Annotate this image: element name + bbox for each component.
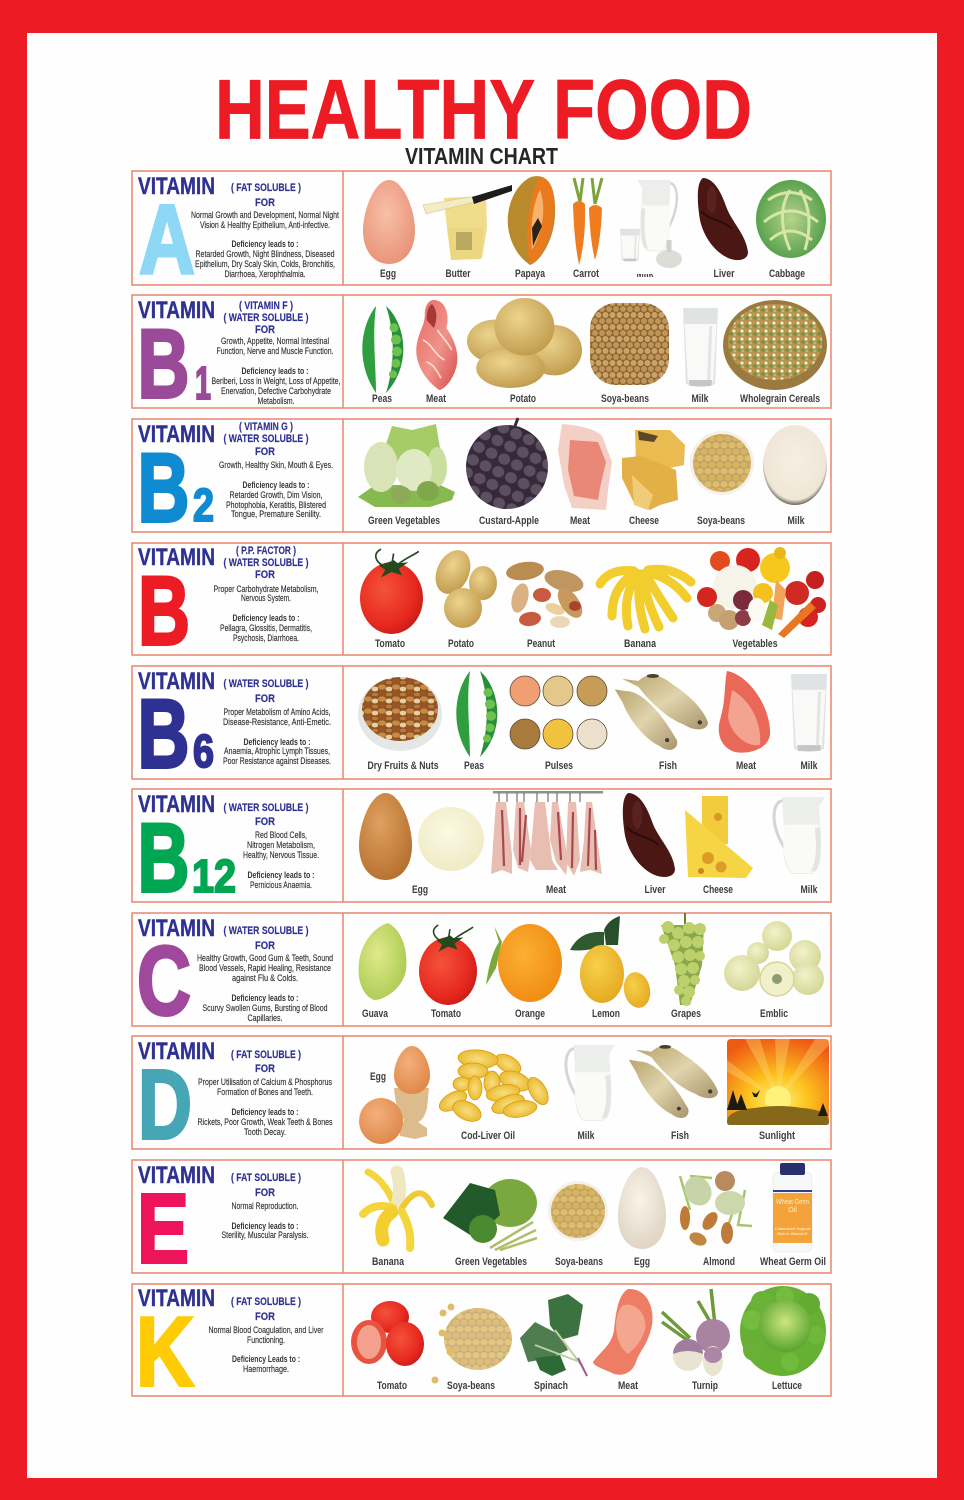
description text: Red Blood Cells, <box>255 830 307 841</box>
description text <box>219 421 333 520</box>
description text: Growth, Appetite, Normal Intestinal <box>221 336 329 347</box>
food: milk <box>763 425 827 527</box>
food: milk jug <box>774 797 825 896</box>
food: wheat germ oil bottle: Cottonseed Support <box>775 1226 811 1231</box>
food: meat <box>593 1289 653 1392</box>
description text: Deficiency leads to : <box>232 1107 298 1118</box>
food: meat <box>719 671 770 772</box>
description text: Normal Reproduction. <box>232 1201 298 1212</box>
food: liver: Liver <box>644 884 666 896</box>
description text: FOR <box>255 1187 275 1199</box>
big letter B1: B <box>138 308 190 418</box>
description text: Metabolism. <box>258 396 294 407</box>
panel: vitamin D <box>132 1036 831 1160</box>
food: wheat germ oil bottle: Oil <box>788 1207 797 1214</box>
panel: vitamin C <box>132 913 831 1036</box>
panel: vitamin B <box>132 543 831 666</box>
food: wheat germ oil bottle: Rich in Vitamin E <box>777 1231 808 1236</box>
food: egg <box>363 180 415 280</box>
food: milk <box>683 308 718 405</box>
food: guava: Guava <box>362 1008 389 1020</box>
description text: Deficiency leads to : <box>244 737 310 748</box>
description text: ( FAT SOLUBLE ) <box>231 1172 301 1184</box>
food: orange: Orange <box>515 1008 545 1020</box>
description text: Pellagra, Glossitis, Dermatitis, <box>220 623 312 634</box>
description text: ( WATER SOLUBLE ) <box>224 925 309 937</box>
description text: FOR <box>255 569 275 581</box>
food: fish: Fish <box>671 1130 689 1142</box>
food: wholegrain cereals <box>723 300 827 405</box>
description text: ( WATER SOLUBLE ) <box>224 557 309 569</box>
description text: Poor Resistance against Diseases. <box>223 756 331 767</box>
food: wheat germ oil bottle <box>760 1163 826 1268</box>
description text: Epithelium, Dry Scaly Skin, Colds, Bronchitis, <box>195 259 335 270</box>
food: mixed vegetables: Vegetables <box>732 638 778 650</box>
food: carrot <box>573 178 602 280</box>
food: liver <box>698 178 748 280</box>
food: meat: Meat <box>570 515 590 527</box>
food: hanging meat <box>491 791 603 896</box>
food: peas <box>362 306 403 405</box>
food: eggs: Egg <box>412 884 428 896</box>
food: soya-beans: Soya-beans <box>555 1256 603 1268</box>
food: emblic <box>724 921 824 1020</box>
description text <box>222 1172 308 1241</box>
description text <box>212 300 340 407</box>
food: meat <box>416 300 457 405</box>
food: soya-beans <box>590 303 669 405</box>
big letter A: A <box>139 184 195 294</box>
description text <box>198 1049 333 1138</box>
food: tomato: Tomato <box>431 1008 461 1020</box>
food: peas: Peas <box>464 760 484 772</box>
description text: Nervous System. <box>241 593 291 604</box>
description text: Nitrogen Metabolism, <box>247 840 315 851</box>
description text: ( FAT SOLUBLE ) <box>231 1296 301 1308</box>
food: cheese <box>622 430 685 527</box>
heading: vitamin: VITAMIN <box>138 668 215 695</box>
food: cabbage <box>756 180 826 280</box>
description text: Rickets, Poor Growth, Weak Teeth & Bones <box>198 1117 333 1128</box>
food: peanut: Peanut <box>527 638 555 650</box>
description text: Normal Blood Coagulation, and Liver <box>208 1325 324 1336</box>
food: lettuce <box>740 1286 826 1392</box>
food: milk: Milk <box>692 393 709 405</box>
food: cabbage: Cabbage <box>769 268 805 280</box>
description text: Deficiency leads to : <box>232 1221 298 1232</box>
big letter B2: B <box>138 432 190 542</box>
description text: Deficiency leads to : <box>248 870 314 881</box>
description text: Retarded Growth, Night Blindness, Diseased <box>196 249 334 260</box>
food: fish <box>614 674 708 772</box>
description text: FOR <box>255 324 275 336</box>
food: grapes <box>659 913 706 1020</box>
heading: vitamin: VITAMIN <box>138 1038 215 1065</box>
description text: Normal Growth and Development, Normal Night <box>191 210 339 221</box>
description text: Pernicious Anaemia. <box>250 880 312 891</box>
description text: Capillaries. <box>248 1013 282 1024</box>
description text: ( VITAMIN G ) <box>239 421 293 433</box>
description text: FOR <box>255 197 275 209</box>
description text: Diarrhoea, Xerophthalmia. <box>224 269 306 280</box>
food: sunlight <box>727 1039 829 1142</box>
big letter B: B <box>138 556 190 666</box>
big letter B6: 6 <box>193 725 214 777</box>
food: tomato: Tomato <box>375 638 405 650</box>
description text: ( WATER SOLUBLE ) <box>224 802 309 814</box>
big letter B12: 12 <box>192 850 236 902</box>
food: green vegetables: Green Vegetables <box>368 515 440 527</box>
food: milk jug <box>620 180 682 280</box>
description text: ( WATER SOLUBLE ) <box>224 678 309 690</box>
panel: vitamin B12 <box>132 789 831 912</box>
description text: FOR <box>255 446 275 458</box>
description text: Healthy Growth, Good Gum & Teeth, Sound <box>197 953 333 964</box>
description text: Tooth Decay. <box>244 1127 286 1138</box>
big letter B12: B <box>138 802 190 912</box>
food: banana <box>600 569 691 650</box>
food: wholegrain cereals: Wholegrain Cereals <box>740 393 820 405</box>
food: cod-liver oil: Cod-Liver Oil <box>461 1130 515 1142</box>
food: tomatoes <box>351 1301 424 1392</box>
big letter B1: 1 <box>195 357 211 409</box>
description text: against Flu & Colds. <box>232 973 298 984</box>
food: potato: Potato <box>510 393 536 405</box>
food: custard-apple: Custard-Apple <box>479 515 539 527</box>
food: milk jug: Milk <box>636 268 654 280</box>
food: papaya: Papaya <box>515 268 546 280</box>
description text: Deficiency leads to : <box>232 239 298 250</box>
food: emblic: Emblic <box>760 1008 788 1020</box>
food: soya-beans: Soya-beans <box>697 515 745 527</box>
food: butter <box>423 185 512 280</box>
food: almond: Almond <box>703 1256 735 1268</box>
big letter C: C <box>137 926 191 1036</box>
food: butter: Butter <box>446 268 471 280</box>
heading: vitamin: VITAMIN <box>138 173 215 200</box>
description text: Function, Nerve and Muscle Function. <box>216 346 334 357</box>
food: tomato <box>360 549 423 650</box>
description text: ( FAT SOLUBLE ) <box>231 1049 301 1061</box>
food: milk <box>791 674 827 772</box>
description text: Proper Metabolism of Amino Acids, <box>224 707 330 718</box>
description text: Sterility, Muscular Paralysis. <box>222 1230 308 1241</box>
description text <box>214 545 318 644</box>
food: soya-beans <box>548 1181 608 1268</box>
food: fish: Fish <box>659 760 677 772</box>
food: custard-apple <box>466 418 548 527</box>
description text: Deficiency Leads to : <box>232 1354 300 1365</box>
food: soya-beans: Soya-beans <box>601 393 649 405</box>
description text: Deficiency leads to : <box>232 613 300 624</box>
description text: FOR <box>255 816 275 828</box>
heading: vitamin: VITAMIN <box>138 421 215 448</box>
description text: ( WATER SOLUBLE ) <box>224 433 309 445</box>
heading: vitamin: VITAMIN <box>138 915 215 942</box>
description text: Formation of Bones and Teeth. <box>217 1087 313 1098</box>
food: peas <box>456 671 497 772</box>
description text <box>191 182 339 280</box>
food: banana: Banana <box>624 638 657 650</box>
description text <box>208 1296 324 1375</box>
food: tomato <box>419 925 477 1020</box>
food: meat <box>558 424 612 527</box>
food: cheese <box>685 796 753 896</box>
food: grapes: Grapes <box>671 1008 701 1020</box>
description text: ( WATER SOLUBLE ) <box>224 312 309 324</box>
description text: FOR <box>255 693 275 705</box>
food: wheat germ oil bottle: Wheat Germ Oil <box>760 1256 826 1268</box>
description text: Functioning. <box>247 1335 285 1346</box>
food: cod-liver oil <box>436 1048 552 1142</box>
food: liver <box>623 793 675 896</box>
panel: vitamin B2 <box>132 418 831 542</box>
food: egg: Egg <box>634 1256 650 1268</box>
description text: Tongue, Premature Senility. <box>231 509 321 520</box>
description text: Enervation, Defective Carbohydrate <box>221 386 331 397</box>
food: eggs in cup <box>359 1046 430 1144</box>
heading: vitamin: VITAMIN <box>138 1162 215 1189</box>
food: cheese: Cheese <box>703 884 733 896</box>
heading: vitamin: VITAMIN <box>138 297 215 324</box>
food: meat: Meat <box>426 393 446 405</box>
description text: ( P.P. FACTOR ) <box>236 545 296 557</box>
food: hanging meat: Meat <box>546 884 566 896</box>
food: orange <box>486 924 562 1020</box>
food: meat: Meat <box>736 760 756 772</box>
description text: Anaemia, Atrophic Lymph Tissues, <box>224 746 330 757</box>
panel: vitamin B1 <box>132 295 831 418</box>
description text: Healthy, Nervous Tissue. <box>243 850 319 861</box>
food: cheese: Cheese <box>629 515 659 527</box>
food: milk jug: Milk <box>578 1130 595 1142</box>
food: papaya <box>508 176 555 280</box>
description text <box>197 925 333 1024</box>
food: sunlight: Sunlight <box>759 1130 795 1142</box>
food: egg <box>618 1167 666 1268</box>
food: turnip <box>662 1289 730 1392</box>
food: peanut <box>505 559 587 650</box>
title: HEALTHY FOOD <box>215 62 752 156</box>
heading: vitamin: VITAMIN <box>138 1285 215 1312</box>
food: eggs <box>359 793 484 896</box>
food: tomatoes: Tomato <box>377 1380 407 1392</box>
food: dry fruits and nuts <box>358 677 442 772</box>
big letter B6: B <box>138 678 190 788</box>
big letter B2: 2 <box>193 479 214 531</box>
description text: Vision & Healthy Epithelium, Anti-infective. <box>200 220 330 231</box>
food: banana <box>363 1172 432 1268</box>
description text: Proper Utilisation of Calcium & Phosphorus <box>198 1077 332 1088</box>
description text: FOR <box>255 940 275 952</box>
description text <box>224 802 319 891</box>
food: pulses: Pulses <box>545 760 573 772</box>
food: green vegetables <box>443 1179 537 1268</box>
subtitle: VITAMIN CHART <box>405 143 558 169</box>
food: peas: Peas <box>372 393 392 405</box>
food: potato <box>429 544 497 650</box>
description text: Scurvy Swollen Gums, Bursting of Blood <box>202 1003 328 1014</box>
food: dry fruits and nuts: Dry Fruits & Nuts <box>368 760 438 772</box>
description text: Deficiency leads to : <box>242 366 308 377</box>
description text: Disease-Resistance, Anti-Emetic. <box>223 717 331 728</box>
food: milk: Milk <box>788 515 805 527</box>
big letter D: D <box>138 1050 192 1160</box>
description text: Proper Carbohydrate Metabolism, <box>214 584 318 595</box>
description text: FOR <box>255 1311 275 1323</box>
food: lettuce: Lettuce <box>772 1380 802 1392</box>
description text: Psychosis, Diarrhoea. <box>233 633 299 644</box>
food: mixed vegetables <box>697 547 826 650</box>
food: egg: Egg <box>380 268 396 280</box>
panel: vitamin E <box>132 1160 831 1284</box>
description text: Haemorrhage. <box>243 1364 289 1375</box>
food: potato: Potato <box>448 638 474 650</box>
food: banana: Banana <box>372 1256 405 1268</box>
description text: Retarded Growth, Dim Vision, <box>230 490 322 501</box>
description text: ( VITAMIN F ) <box>239 300 293 312</box>
food: lemon: Lemon <box>592 1008 620 1020</box>
description text: Beriberi, Loss in Weight, Loss of Appetite, <box>212 376 340 387</box>
description text: Growth, Healthy Skin, Mouth & Eyes. <box>219 460 333 471</box>
description text: Blood Vessels, Rapid Healing, Resistance <box>199 963 331 974</box>
description text: Deficiency leads to : <box>232 993 298 1004</box>
heading: vitamin: VITAMIN <box>138 544 215 571</box>
food: meat: Meat <box>618 1380 638 1392</box>
description text: Deficiency leads to : <box>242 480 310 491</box>
food: spinach <box>520 1294 587 1392</box>
food: green vegetables <box>358 424 455 527</box>
big letter K: K <box>136 1296 194 1406</box>
food: pulses <box>510 676 607 772</box>
food: milk jug: Milk <box>800 884 818 896</box>
food: liver: Liver <box>714 268 735 280</box>
food: milk jug <box>566 1045 615 1142</box>
food: soya-beans <box>690 431 754 527</box>
description text: FOR <box>255 1063 275 1075</box>
panel: vitamin B6 <box>132 666 831 788</box>
panel: vitamin K <box>132 1284 831 1406</box>
description text: ( FAT SOLUBLE ) <box>231 182 301 194</box>
food: milk: Milk <box>800 760 818 772</box>
big letter E: E <box>137 1174 189 1284</box>
food: eggs in cup: Egg <box>370 1071 386 1083</box>
description text: Photophobia, Keratitis, Blistered <box>226 500 326 511</box>
food: guava <box>359 923 406 1020</box>
panel: vitamin A <box>132 171 831 294</box>
food: turnip: Turnip <box>692 1380 718 1392</box>
food: potato <box>467 298 582 405</box>
food: almond <box>679 1171 752 1268</box>
food: carrot: Carrot <box>573 268 599 280</box>
food: lemon <box>570 916 653 1020</box>
food: spinach: Spinach <box>534 1380 568 1392</box>
food: green vegetables: Green Vegetables <box>455 1256 527 1268</box>
heading: vitamin: VITAMIN <box>138 791 215 818</box>
food: soya-beans: Soya-beans <box>447 1380 495 1392</box>
description text <box>223 678 331 767</box>
food: fish <box>628 1045 718 1142</box>
food: wheat germ oil bottle: Wheat Germ <box>776 1199 809 1206</box>
food: soya-beans <box>432 1304 512 1392</box>
